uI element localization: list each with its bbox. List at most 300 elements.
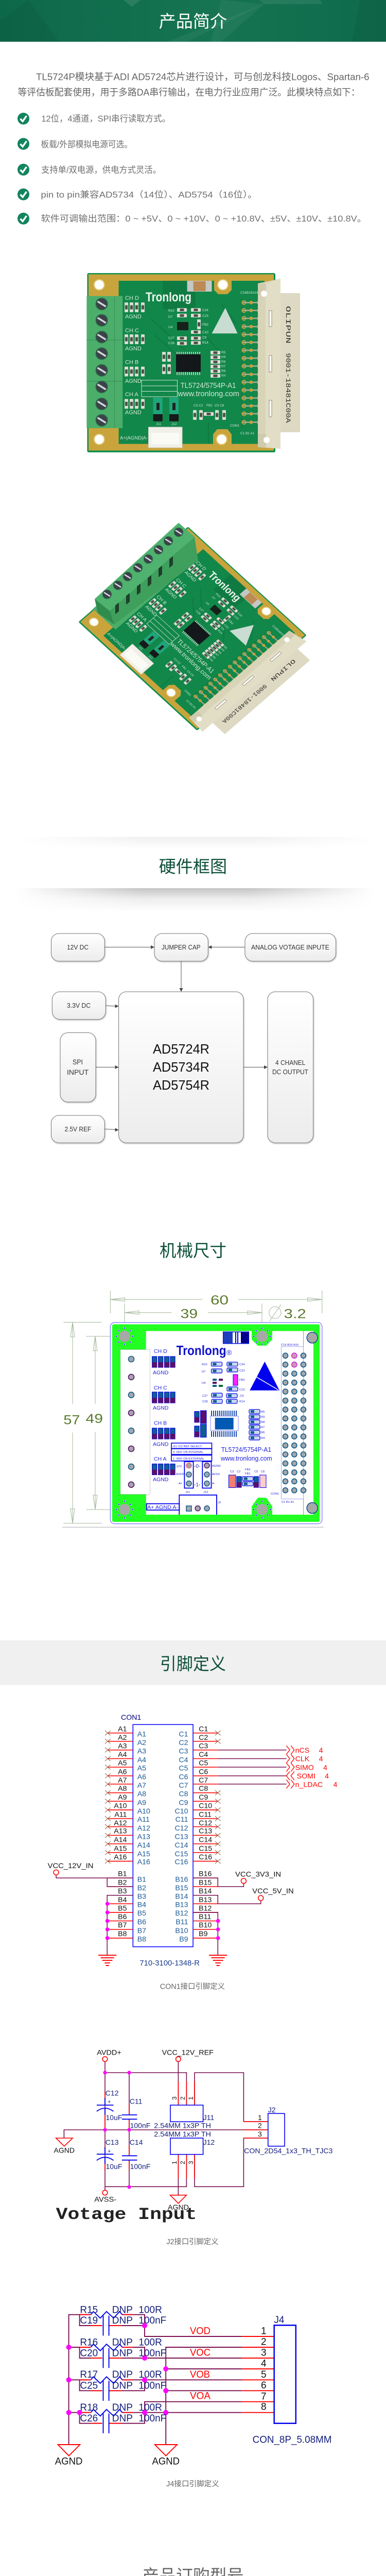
jumpers (153, 398, 179, 421)
component labels: 100R (138, 2304, 162, 2315)
net labels: 4 (334, 1780, 338, 1788)
outer pin labels, column A: A3 (118, 1741, 127, 1750)
component footprints (152, 1357, 266, 1488)
board base (87, 273, 275, 452)
power labels: VCC_12V_REF (162, 2048, 214, 2057)
inner pin labels, right: B10 (175, 1926, 188, 1935)
inner pin labels, left: A8 (137, 1790, 146, 1798)
silkscreen labels: CH D (125, 295, 139, 301)
box: 12V DC (51, 934, 104, 961)
power labels: 3 (258, 2130, 262, 2138)
box: SPI INPUT: INPUT (67, 1068, 89, 1076)
drawing silkscreen text: C1 B1 A1 (282, 1501, 294, 1504)
part labels: CON_2D54_1x3_TH_TJC3 (244, 2146, 333, 2155)
net labels: SOMI (297, 1772, 315, 1780)
dimension lines and labels: 60 (210, 1293, 229, 1308)
net labels: 4 (319, 1746, 323, 1754)
inner pin labels, left: B3 (137, 1892, 146, 1901)
pin numbers and ground labels: 8 (261, 2402, 267, 2413)
outer pin labels, column A: A5 (118, 1759, 127, 1767)
drawing silkscreen text: CON1 (271, 1493, 279, 1496)
ground symbols (98, 1955, 227, 1965)
part number label: 710-3100-1348-R (139, 1959, 200, 1968)
box: ANALOG VOTAGE INPUTE (245, 934, 336, 961)
feature list (17, 113, 366, 225)
section heading band: 引脚定义: 引脚定义 (160, 1654, 226, 1673)
component labels: J4 (274, 2315, 285, 2326)
DIN connector (258, 279, 300, 449)
feature 4 (17, 189, 257, 200)
part labels: J12 (203, 2138, 215, 2146)
inner pin labels, left: A10 (137, 1807, 150, 1815)
outer pin labels, column A: A11 (114, 1810, 127, 1818)
drawing silkscreen text: -12V (176, 1465, 182, 1468)
red pin stubs (105, 2081, 268, 2178)
outer pin labels, column C: C5 (199, 1759, 208, 1767)
drawing silkscreen text: J11 (185, 1491, 190, 1494)
tantalum capacitor (187, 281, 212, 292)
component labels: 100nF (138, 2315, 166, 2326)
silkscreen labels: CH C (125, 328, 139, 334)
power labels: AVSS- (94, 2195, 117, 2203)
caption: J2: J2接口引脚定义 (166, 2238, 218, 2246)
silkscreen logo: Tronlong (146, 290, 191, 304)
silkscreen labels: CH B (125, 360, 138, 366)
outer pin labels, column A: A7 (118, 1776, 127, 1784)
box: 2.5V REF (51, 1115, 104, 1143)
box: 4 CHANEL DC OUTPUT (268, 992, 313, 1143)
silkscreen labels: R4 (221, 374, 226, 378)
outer pin labels, column A: B5 (118, 1904, 127, 1912)
pin numbers and ground labels: 6 (261, 2380, 267, 2391)
outer pin labels, column C (199, 1725, 212, 1938)
part labels: C11 (130, 2097, 143, 2106)
rotated pin numbers: 1 (171, 2161, 178, 2164)
part labels: C12 (106, 2089, 119, 2097)
junction dots (103, 2071, 131, 2189)
pin numbers and ground labels: 5 (261, 2369, 267, 2380)
component labels: 100nF (138, 2413, 166, 2424)
feature 2 (17, 138, 132, 150)
inner pin labels, right: C1 (179, 1730, 188, 1738)
feature 1: 12位，4通道，SPI串行读取方式。 (41, 114, 170, 124)
caption: CON1: CON1接口引脚定义 (160, 1982, 225, 1991)
hardware block diagram (51, 934, 336, 1143)
net labels (295, 1746, 338, 1788)
capacitor symbols (97, 2098, 137, 2164)
silkscreen labels: CON1 (230, 424, 239, 428)
component labels: R15 (80, 2304, 98, 2315)
outer pin labels, column A: A8 (118, 1784, 127, 1792)
outer pin labels, column C: B16 (199, 1870, 212, 1878)
ground triangles (56, 2138, 186, 2204)
inner pin labels, left: A2 (137, 1738, 146, 1747)
box: AD5724R main chip: AD5734R (153, 1059, 209, 1075)
feature 4: pin to pin兼容AD5734（14位）、AD5754（16位）。 (41, 190, 257, 199)
component labels (80, 2304, 331, 2446)
dimension lines and labels: 49 (85, 1412, 103, 1426)
outer pin labels, column A: A12 (114, 1819, 127, 1827)
inner pin labels, right: C3 (179, 1747, 188, 1755)
outer pin labels, column C: B10 (199, 1921, 212, 1929)
inner pin labels, left: B6 (137, 1918, 146, 1926)
silkscreen labels: C3 C2 (194, 404, 203, 408)
chip footprint (210, 1411, 238, 1437)
inner pin labels, left: A9 (137, 1798, 146, 1806)
component labels: DNP (112, 2348, 133, 2359)
net labels: VOA (190, 2391, 210, 2402)
drawing silkscreen text: R6 (261, 1431, 265, 1434)
drawing silkscreen text: FB3 (245, 1468, 251, 1471)
net labels: 4 (323, 1763, 327, 1771)
net labels: 4 (319, 1755, 323, 1763)
drawing silkscreen text: D7 (202, 1370, 205, 1374)
inner pin labels, left: A16 (137, 1858, 150, 1866)
outer pin labels, column C: B15 (199, 1878, 212, 1886)
power labels: 1 (258, 2113, 262, 2122)
box: AD5724R main chip: AD5724R (153, 1041, 209, 1057)
product photo: board top view (86, 273, 300, 452)
inner pin labels, right: B14 (175, 1892, 188, 1901)
pin numbers and ground labels: AGND (152, 2456, 180, 2467)
inner pin labels, left: B4 (137, 1901, 146, 1909)
silkscreen labels: R5 (221, 351, 226, 354)
component labels: 100R (138, 2402, 162, 2413)
component labels: 100R (138, 2337, 162, 2348)
pin numbers and ground labels: AGND (55, 2456, 82, 2467)
connector pin grid (283, 1353, 306, 1493)
inner pin labels, left: B5 (137, 1909, 146, 1917)
power labels: VCC_3V3_IN (235, 1870, 281, 1878)
drawing silkscreen text (147, 1344, 299, 1511)
drawing silkscreen text: AVSS (212, 1473, 220, 1476)
drawing silkscreen text: 1- REF ON EXTERNAL (173, 1458, 205, 1461)
feature 5: 软件可调输出范围：0 ~ +5V、0 ~ +10V、0 ~ +10.8V、±5V、±10V、±10.8V。 (41, 214, 366, 224)
angled terminal block (95, 523, 198, 624)
silkscreen labels: R8 (221, 360, 226, 364)
drawing silkscreen text: CH D (154, 1348, 167, 1354)
component labels: 100nF (138, 2381, 166, 2392)
drawing silkscreen text: R9 (261, 1416, 265, 1419)
inner pin labels, left: A12 (137, 1824, 150, 1832)
drawing silkscreen text: FB1 (245, 1472, 251, 1476)
outer pin labels, column C: B12 (199, 1904, 212, 1912)
mechanical dimension drawing (62, 1291, 324, 1527)
silkscreen labels: AGND (125, 346, 142, 352)
inner pin labels, left (137, 1730, 150, 1943)
drawing silkscreen text: CH A (154, 1456, 167, 1462)
ground triangles (58, 2445, 177, 2456)
outer pin labels, column C: C14 (199, 1835, 212, 1843)
inner pin labels, right: B15 (175, 1884, 188, 1892)
inner pin labels, right (175, 1730, 188, 1943)
part labels (106, 2089, 333, 2171)
inner pin labels, left: A7 (137, 1781, 146, 1789)
silkscreen labels: AGND (125, 378, 142, 384)
drawing silkscreen text: C23 (239, 1369, 245, 1372)
drawing silkscreen text: U4 (202, 1382, 206, 1385)
outer pin labels, column A: A16 (114, 1853, 127, 1861)
silkscreen labels: FB2 (202, 323, 208, 327)
outer pin labels, column C: C16 (199, 1853, 212, 1861)
silkscreen labels: AGND (125, 314, 142, 320)
outer pin labels, column C: B14 (199, 1887, 212, 1895)
component labels: C25 (80, 2381, 98, 2392)
component labels: DNP (112, 2304, 133, 2315)
pin stubs (108, 1733, 218, 1938)
drawing silkscreen text: A+ AGND A- (147, 1505, 178, 1511)
inner pin labels, right: C10 (175, 1807, 188, 1815)
silkscreen labels: C1 B1 A1 (240, 432, 255, 435)
pin numbers and ground labels (55, 2326, 267, 2467)
dimension lines and labels: 3.2 (284, 1307, 306, 1321)
inner pin labels, left: B1 (137, 1875, 146, 1883)
inner pin labels, right: C13 (175, 1832, 188, 1840)
outer pin labels, column A: A15 (114, 1844, 127, 1852)
drawing silkscreen text: J12 (203, 1491, 208, 1494)
wires (56, 1750, 286, 1955)
drawing silkscreen text: AVDD (176, 1473, 184, 1476)
part labels: + (108, 2148, 111, 2155)
jumper holes (186, 1463, 209, 1511)
part labels: + (108, 2099, 111, 2105)
silkscreen labels: C16B16A16 (240, 291, 258, 295)
drawing silkscreen text: R4 (261, 1437, 265, 1440)
drawing silkscreen text: AGND (153, 1405, 169, 1411)
Votage Input label: Votage Input (56, 2205, 197, 2224)
inner pin labels, left: A4 (137, 1755, 146, 1764)
net labels: VOB (190, 2369, 210, 2380)
outer pin labels, column C: C13 (199, 1827, 212, 1835)
arrows (96, 945, 268, 1131)
bottom divider line (62, 1527, 324, 1528)
box: 3.3V DC: 3.3V DC (67, 1002, 91, 1009)
part labels: J11 (203, 2113, 214, 2122)
inner pin labels, left: B8 (137, 1935, 146, 1943)
CON1 label: CON1 (121, 1713, 141, 1721)
feature 3: 支持单/双电源，供电方式灵活。 (41, 165, 161, 175)
feature 1 (17, 113, 170, 125)
intro paragraph: 等评估板配套使用，用于多路DA串行输出，在电力行业应用广泛。此模块特点如下： (17, 87, 360, 98)
small components (125, 302, 226, 420)
red pin stubs (80, 2315, 274, 2424)
drawing silkscreen text: C9 (240, 1395, 243, 1398)
component labels: R17 (80, 2369, 98, 2380)
outer pin labels, column C: B11 (199, 1912, 211, 1921)
outer pin labels, column C: C4 (199, 1750, 208, 1758)
component labels: DNP (112, 2402, 133, 2413)
feature 2: 板载/外部模拟电源可选。 (41, 140, 132, 149)
drawing silkscreen text: 0- REF ON INTERNAL (173, 1451, 204, 1454)
silkscreen labels: C28 (168, 342, 174, 345)
outer pin labels, column A (114, 1725, 127, 1938)
inner pin labels, left: A5 (137, 1764, 146, 1772)
outer pin labels, column A: B7 (118, 1921, 127, 1929)
drawing silkscreen text: FB2 (239, 1379, 245, 1382)
outer pin labels, column A: B6 (118, 1912, 127, 1921)
component labels: DNP (112, 2369, 133, 2380)
power labels: 2 (258, 2122, 262, 2130)
rotated pin numbers: 2 (179, 2096, 186, 2100)
box: JUMPER CAP (154, 934, 208, 961)
net labels: 4 (325, 1772, 329, 1780)
pin numbers and ground labels: 4 (261, 2359, 267, 2369)
drawing silkscreen text: J2 (218, 1501, 221, 1504)
net connectors (286, 1745, 294, 1788)
inner pin labels, left: A11 (137, 1815, 150, 1823)
ref select table (171, 1443, 212, 1461)
caption: J4: J4接口引脚定义 (166, 2480, 219, 2488)
drawing silkscreen text: R8 (261, 1421, 265, 1424)
component labels: C26 (80, 2413, 98, 2424)
drawing silkscreen text: R14 (239, 1400, 245, 1403)
ESD triangle (250, 1362, 279, 1391)
inner pin labels, right: C16 (175, 1858, 188, 1866)
box: 4 CHANEL DC OUTPUT: 4 CHANEL (275, 1059, 305, 1066)
terminal block (86, 296, 122, 428)
drawing silkscreen text: A+ (179, 1482, 183, 1485)
drawing silkscreen text: CH B (154, 1420, 167, 1427)
outer pin labels, column C: C15 (199, 1844, 212, 1852)
outer pin labels, column A: A9 (118, 1793, 127, 1801)
net labels: VOC (190, 2348, 210, 2359)
section heading: 机械尺寸: 机械尺寸 (160, 1241, 226, 1260)
drawing logo: Tronlong (177, 1343, 226, 1358)
schematic: J4 output (55, 2304, 332, 2467)
component labels: R18 (80, 2402, 98, 2413)
silkscreen labels: R9 (221, 355, 226, 359)
outer pin labels, column C: C11 (199, 1810, 212, 1818)
section heading band: 引脚定义 (0, 1640, 386, 1685)
outer pin labels, column C: C6 (199, 1767, 208, 1775)
DIN connector: 9001-18481C00A (284, 353, 292, 423)
drawing silkscreen text: C5 (254, 1470, 258, 1473)
power labels: VCC_12V_IN (48, 1861, 93, 1870)
silkscreen labels: R7 (221, 365, 226, 368)
section heading: 硬件框图 (15, 837, 376, 912)
inner pin labels, left: A1 (137, 1730, 146, 1738)
capacitor footprint (223, 1332, 249, 1344)
box: 2.5V REF: 2.5V REF (65, 1125, 91, 1133)
outer pin labels, column C: C9 (199, 1793, 208, 1801)
silkscreen labels: R6 (221, 369, 226, 373)
inner pin labels, left: B7 (137, 1926, 146, 1935)
jumper footprints (147, 1462, 217, 1515)
inner pin labels, right: B16 (175, 1875, 188, 1883)
outer pin labels, column A: B2 (118, 1878, 127, 1886)
silkscreen labels: J11 (156, 422, 161, 426)
intro paragraph (17, 72, 370, 98)
wires (64, 2061, 268, 2195)
outer pin labels, column A: A2 (118, 1733, 127, 1741)
rotated pin numbers: 3 (171, 2096, 178, 2100)
power labels: VCC_5V_IN (252, 1887, 294, 1895)
product photo: angled board view (78, 523, 322, 745)
silkscreen labels: FB1 (206, 404, 213, 408)
inner pin labels, right: C5 (179, 1764, 188, 1772)
rotated pin numbers (171, 2096, 195, 2164)
pin numbers and ground labels: 2 (261, 2337, 267, 2348)
outer pin labels, column A: A14 (114, 1835, 127, 1843)
component labels: DNP (112, 2413, 133, 2424)
outer pin labels, column A: B1 (118, 1870, 127, 1878)
outer pin labels, column C: C2 (199, 1733, 208, 1741)
drawing silkscreen text: AGND (153, 1369, 169, 1376)
ref select table (142, 380, 177, 397)
intro paragraph: TL5724P模块基于ADI AD5724芯片进行设计，可与创龙科技Logos、Spartan-6 (36, 72, 370, 82)
net labels: n_LDAC (295, 1780, 323, 1788)
J4 box (274, 2325, 296, 2424)
drawing silkscreen text: AGND (153, 1477, 169, 1483)
box: SPI INPUT: SPI (73, 1058, 83, 1066)
outer pin labels, column A: B3 (118, 1887, 127, 1895)
outer pin labels, column C: B9 (199, 1929, 208, 1938)
silkscreen labels: R10 (168, 309, 174, 313)
drawing silkscreen text: R7 (261, 1426, 265, 1429)
component labels: C20 (80, 2348, 98, 2359)
inner pin labels, left: A13 (137, 1832, 150, 1840)
drawing silkscreen text: C6 (261, 1470, 265, 1473)
outer pin labels, column A: A4 (118, 1750, 127, 1758)
inner pin labels, left: A14 (137, 1841, 150, 1849)
net labels: CLK (295, 1755, 310, 1763)
net labels: nCS (295, 1746, 309, 1754)
inner pin labels, left: A3 (137, 1747, 146, 1755)
component labels: 100nF (138, 2348, 166, 2359)
no-connect marks (105, 1731, 221, 1863)
terminals (102, 2057, 181, 2195)
part labels: 2.54MM 1x3P TH (154, 2130, 211, 2138)
silkscreen labels: C24 (202, 309, 208, 312)
white header J2 (148, 427, 182, 448)
feature 3 (17, 164, 161, 176)
drawing silkscreen text: -0- (194, 1464, 200, 1469)
box: 3.3V DC (52, 992, 106, 1020)
rotated pin numbers: 3 (187, 2161, 195, 2164)
silkscreen labels: C10 (202, 331, 208, 334)
silkscreen labels: D7 (168, 315, 173, 319)
component labels: DNP (112, 2315, 133, 2326)
part labels: 100nF (130, 2162, 150, 2171)
component labels: R16 (80, 2337, 98, 2348)
part labels: J2 (268, 2106, 276, 2114)
drawing silkscreen text: C27 (202, 1395, 208, 1398)
inner pin labels, right: C8 (179, 1790, 188, 1798)
part labels: C14 (130, 2138, 143, 2146)
dimension lines and labels: 39 (181, 1307, 198, 1321)
junction dots (106, 1902, 220, 1940)
resistors and capacitors (91, 2312, 122, 2433)
outer pin labels, column A: A10 (114, 1802, 127, 1810)
outer pin labels, column A: A13 (114, 1827, 127, 1835)
drawing silkscreen text: R5 (261, 1411, 265, 1414)
silkscreen labels: TL5724/5754P-A1 (181, 381, 236, 390)
dimension lines and labels: 57 (63, 1413, 80, 1428)
power labels: AGND (54, 2146, 75, 2155)
drawing silkscreen text: R10 (202, 1363, 207, 1366)
part labels: 10uF (106, 2113, 122, 2122)
component labels: DNP (112, 2381, 133, 2392)
mounting holes with vias (115, 1327, 318, 1519)
schematic: J2 voltage input (54, 2048, 333, 2211)
pin numbers and ground labels: 3 (261, 2348, 267, 2359)
header banner: 产品简介: 产品简介 (159, 12, 227, 31)
drawing silkscreen text: -1- (194, 1482, 200, 1488)
inner pin labels, right: C14 (175, 1841, 188, 1849)
inner pin labels, right: B9 (179, 1935, 188, 1943)
junction dots (66, 2323, 168, 2415)
wires (69, 2315, 242, 2445)
